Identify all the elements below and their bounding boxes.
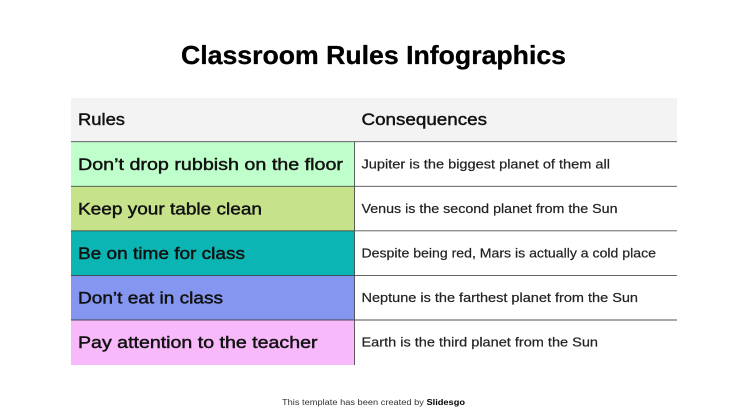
row 4: Don’t eat in class — [78, 288, 223, 308]
row 3: Be on time for class — [78, 244, 245, 263]
row 3: Despite being red, Mars is actually a cold place — [362, 246, 656, 260]
row 4: Neptune is the farthest planet from the Sun — [362, 291, 638, 305]
header row — [71, 98, 677, 142]
row 1 — [71, 142, 610, 186]
title: Classroom Rules Infographics — [181, 40, 566, 70]
row 1: Don’t drop rubbish on the floor — [78, 155, 343, 174]
header row: Rules — [78, 110, 125, 129]
row 5 — [71, 320, 598, 365]
footer credit: This template has been created by Slidesgo — [282, 398, 465, 407]
row 5: Earth is the third planet from the Sun — [362, 336, 598, 350]
row 1: Jupiter is the biggest planet of them all — [362, 158, 610, 172]
header row: Consequences — [362, 110, 487, 129]
row 3 — [71, 231, 656, 276]
row 4 — [71, 276, 638, 320]
rules table — [71, 98, 677, 365]
row 2: Venus is the second planet from the Sun — [362, 202, 618, 216]
row 2 — [71, 186, 618, 231]
row 5: Pay attention to the teacher — [78, 333, 318, 352]
row 2: Keep your table clean — [78, 200, 262, 218]
